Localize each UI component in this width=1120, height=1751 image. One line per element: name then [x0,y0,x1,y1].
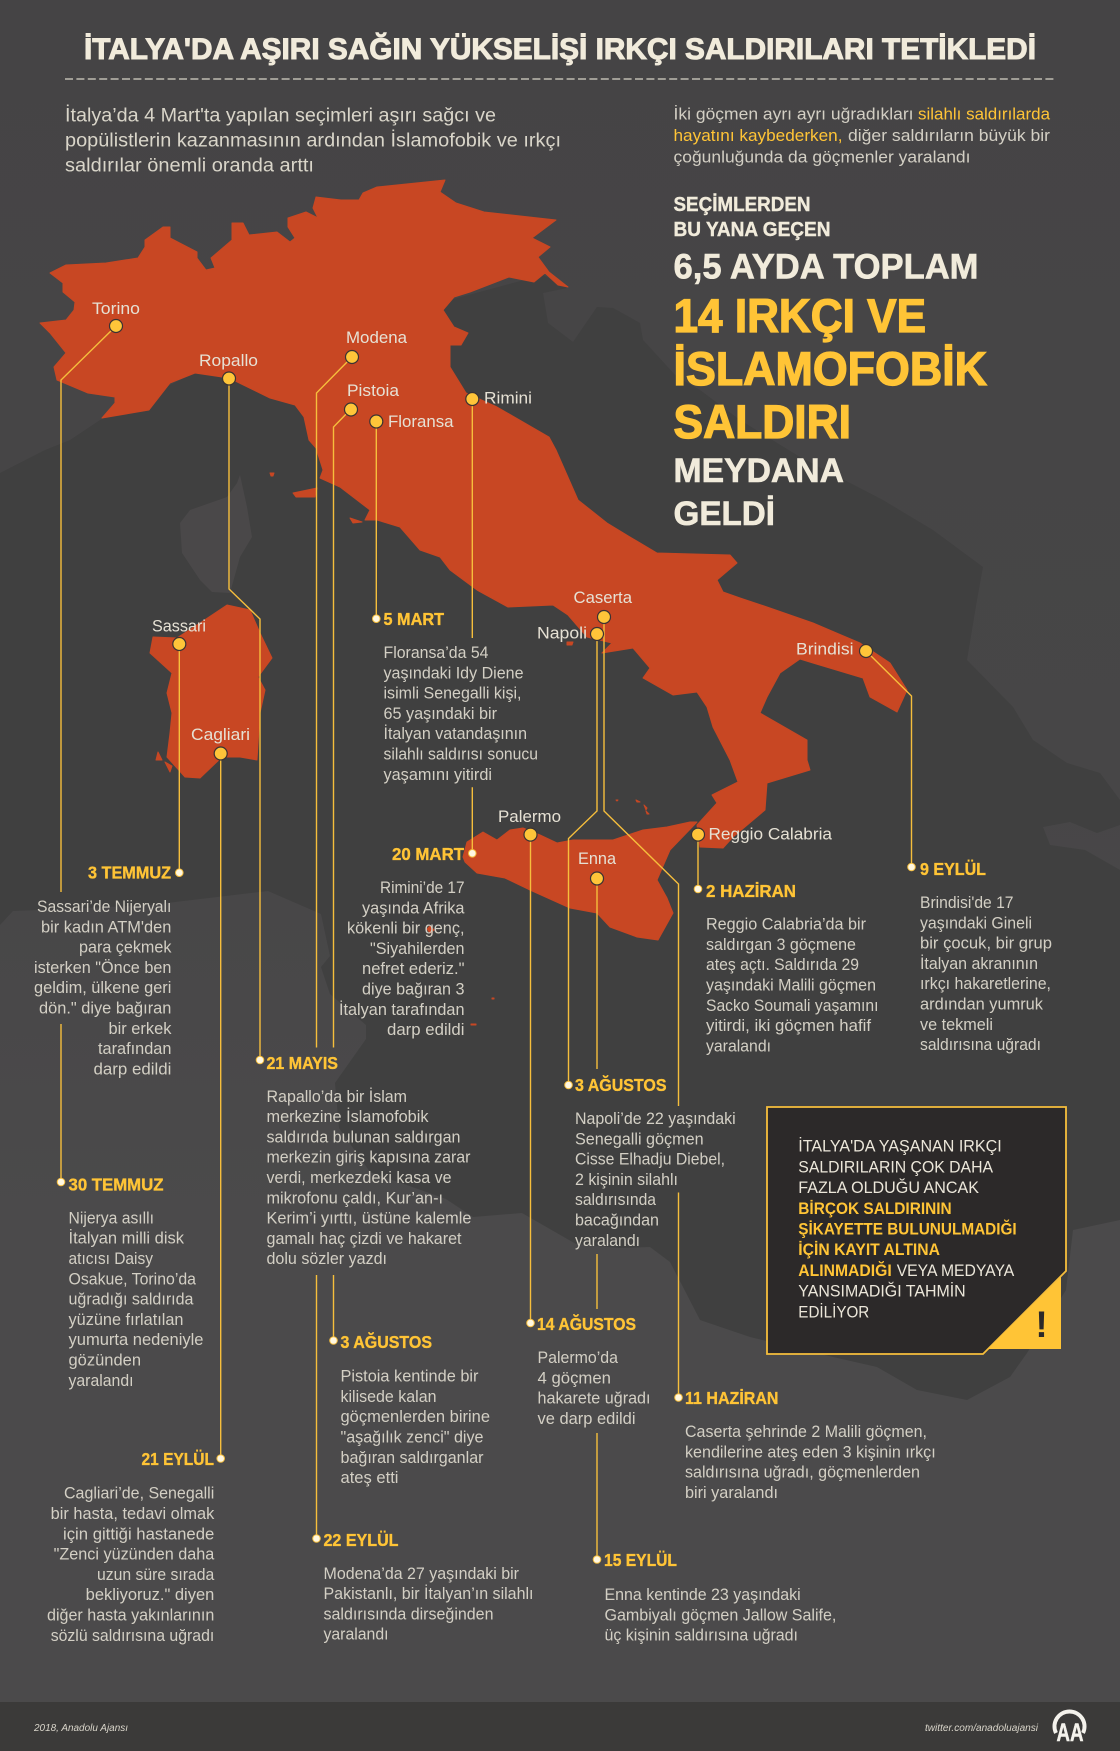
event: 21 Mayis: Kerim’i yırttı, üstüne kalemle [266,1210,472,1228]
intro text right: silahlı saldırılarda [918,105,1051,124]
event: 30 Temmuz [68,1174,204,1390]
connector: Brindisi to 9 Eylul: Brindisi [796,640,854,658]
connector: Rimini to 20 Mart [466,390,532,857]
connector: Floransa to 5 Mart: Floransa [388,413,454,431]
event: 2 Haziran [706,881,878,1055]
event: 14 Agustos: 4 göçmen [538,1369,611,1387]
event: 3 Agustos Napoli: saldırısında [575,1191,657,1209]
connector: Brindisi to 9 Eylul [796,640,915,871]
event: 30 Temmuz: yaralandı [68,1372,134,1390]
event: 5 Mart: yaşındaki Idy Diene [384,664,524,682]
callout text: ŞİKAYETTE BULUNULMADIĞI [798,1220,1017,1239]
headline stat block: SEÇİMLERDEN [674,193,810,216]
event: 2 Haziran: Sacko Soumali yaşamını [706,997,878,1015]
event: 21 Eylul: için gittiği hastanede [63,1525,214,1543]
event: 20 Mart: İtalyan tarafından [339,1000,464,1019]
event: 15 Eylul: üç kişinin saldırısına uğradı [604,1627,798,1645]
event: 3 Agustos Napoli [575,1074,736,1250]
event: 3 Agustos Pistoia: ateş etti [340,1469,398,1487]
event: 21 Mayis: Rapallo’da bir İslam [266,1087,407,1106]
event: 14 Agustos: ve darp edildi [538,1410,636,1428]
connector: Sassari to 3 Temmuz: Sassari [152,618,206,636]
event: 30 Temmuz: gözünden [68,1352,141,1370]
headline stat block: 6,5 AYDA TOPLAM [674,248,978,286]
event: 21 Mayis: verdi, merkezdeki kasa ve [266,1169,452,1187]
intro text right [674,105,1051,166]
event: 21 Mayis: merkezine İslamofobik [266,1107,429,1126]
event: 9 Eylul: Brindisi'de 17 [920,894,1014,912]
event: 11 Haziran: biri yaralandı [685,1484,778,1502]
event: 3 Temmuz: geldim, ülkene geri [34,979,171,997]
event: 21 Eylul: Cagliari’de, Senegalli [64,1485,214,1503]
event: 21 Mayis: 21 MAYIS [266,1053,338,1073]
intro text left: saldırılar önemli oranda arttı [65,156,314,176]
icon: AA logo [1054,1711,1084,1747]
event: 22 Eylul: Pakistanlı, bir İtalyan’ın silahlı [324,1584,534,1603]
event: 14 Agustos: hakarete uğradı [538,1390,650,1408]
connector: Ropallo to 21 Mayis: Ropallo [199,352,258,370]
callout text: İÇİN KAYIT ALTINA [798,1240,940,1259]
event: 20 Mart: darp edildi [387,1021,464,1039]
event: 3 Agustos Napoli: 2 kişinin silahlı [575,1171,678,1189]
connector: Ropallo to 21 Mayis [199,352,264,1064]
intro text right: hayatını kaybederken, [674,126,842,145]
event: 3 Agustos Pistoia: 3 AĞUSTOS [340,1331,432,1352]
event: 15 Eylul: 15 EYLÜL [604,1550,677,1570]
footer: 2018, Anadolu Ajansı [33,1723,128,1734]
event: 30 Temmuz: uğradığı saldırıda [68,1291,194,1309]
callout text: ALINMADIĞI [798,1261,892,1280]
connector: Cagliari to 21 Eylul [191,726,250,1462]
event: 30 Temmuz: yumurta nedeniyle [68,1331,204,1349]
event: 21 Mayis [266,1053,472,1268]
event: 5 Mart [384,609,538,784]
connector: Napoli to 3 Agustos [537,624,604,1089]
event: 3 Temmuz: bir kadın ATM'den [41,918,171,936]
event: 2 Haziran: saldırgan 3 göçmene [706,936,856,954]
event: 30 Temmuz: atıcısı Daisy [68,1250,154,1268]
connector: Rimini to 20 Mart: Rimini [484,390,532,408]
event: 21 Eylul: "Zenci yüzünden daha [54,1546,215,1564]
headline stat block: GELDİ [674,495,775,533]
mainland [40,180,907,848]
event: 15 Eylul: Enna kentinde 23 yaşındaki [604,1586,801,1604]
event: 3 Temmuz: dön." diye bağıran [39,1000,171,1018]
event: 3 Agustos Pistoia [340,1331,490,1487]
callout text: VEYA MEDYAYA [897,1261,1015,1280]
event: 30 Temmuz: 30 TEMMUZ [68,1174,164,1194]
event: 3 Agustos Napoli: Cisse Elhadju Diebel, [575,1151,725,1169]
callout text: BİRÇOK SALDIRININ [798,1199,952,1218]
event: 3 Agustos Napoli: yaralandı [575,1232,640,1250]
event: 30 Temmuz: Nijerya asıllı [68,1209,154,1227]
event: 11 Haziran [685,1388,936,1502]
event: 20 Mart: "Siyahilerden [370,940,464,958]
event: 3 Temmuz: darp edildi [94,1060,171,1078]
connector: Pistoia to 3 Agustos: Pistoia [347,382,400,400]
event: 21 Eylul: bir hasta, tedavi olmak [51,1505,215,1523]
event: 3 Temmuz: bir erkek [108,1020,172,1038]
event: 2 Haziran: yaralandı [706,1037,771,1055]
connector: Pistoia to 3 Agustos [330,382,400,1344]
event: 5 Mart: isimli Senegalli kişi, [384,685,522,703]
event: 2 Haziran: ateş açtı. Saldırıda 29 [706,956,859,974]
headline stat block: 14 IRKÇI VE [674,289,926,342]
title: İTALYA'DA AŞIRI SAĞIN YÜKSELİŞİ IRKÇI SALDIRILARI TETİKLEDİ [84,32,1036,66]
event: 11 Haziran: Caserta şehrinde 2 Malili göçmen, [685,1423,927,1441]
callout text: SALDIRILARIN ÇOK DAHA [798,1158,994,1177]
event: 3 Agustos Napoli: bacağından [575,1212,659,1230]
event: 15 Eylul: Gambiyalı göçmen Jallow Salife, [604,1606,836,1624]
map of Italy [40,180,907,1025]
event: 22 Eylul [324,1530,534,1644]
connector: Enna to 15 Eylul: Enna [578,850,617,868]
event: 20 Mart: yaşında Afrika [362,899,465,917]
intro text right: çoğunluğunda da göçmenler yaralandı [674,148,970,166]
event: 21 Eylul: uzun süre sırada [97,1566,215,1584]
connector: Napoli to 3 Agustos: Napoli [537,624,587,642]
callout box [767,1107,1066,1354]
event: 3 Agustos Pistoia: bağıran saldırganlar [340,1449,484,1467]
event: 14 Agustos: 14 AĞUSTOS [537,1313,636,1334]
event: 3 Agustos Pistoia: göçmenlerden birine [340,1408,490,1426]
callout text: EDİLİYOR [798,1303,869,1322]
callout text: İTALYA'DA YAŞANAN IRKÇI [798,1137,1002,1156]
event: 30 Temmuz: İtalyan milli disk [68,1229,185,1248]
event: 20 Mart: diye bağıran 3 [362,980,464,998]
event: 30 Temmuz: yüzüne fırlatılan [68,1311,184,1329]
intro text right: İki göçmen ayrı ayrı uğradıkları [674,105,914,124]
connector: Cagliari to 21 Eylul: Cagliari [191,726,250,744]
event: 21 Eylul: 21 EYLÜL [142,1449,214,1469]
intro text left: İtalya’da 4 Mart'ta yapılan seçimleri aşırı sağcı ve [65,106,496,126]
event: 14 Agustos [537,1313,650,1428]
event: 9 Eylul: ırkçı hakaretlerine, [920,975,1051,993]
event: 9 Eylul: saldırısına uğradı [920,1036,1041,1054]
event: 2 Haziran: Reggio Calabria’da bir [706,916,867,934]
event: 5 Mart: 5 MART [384,609,444,629]
event: 20 Mart: kökenli bir genç, [347,920,464,938]
event: 22 Eylul: yaralandı [324,1626,388,1644]
connector: Sassari to 3 Temmuz [152,618,206,876]
event: 20 Mart: nefret ederiz." [362,960,465,978]
event: 3 Agustos Pistoia: Pistoia kentinde bir [340,1368,479,1386]
icon: AA logo: AA [1056,1719,1084,1747]
event: 9 Eylul: ve tekmeli [920,1016,993,1034]
event: 21 Mayis: mikrofonu çaldı, Kur’an-ı [266,1189,443,1207]
event: 21 Eylul: bekliyoruz." diyen [86,1586,214,1604]
headline stat block [674,193,987,533]
callout text: FAZLA OLDUĞU ANCAK [798,1178,979,1197]
event: 21 Eylul [47,1449,215,1645]
connector: Reggio Calabria to 2 Haziran [692,826,833,893]
event: 20 Mart [339,844,465,1039]
event: 5 Mart: İtalyan vatandaşının [384,724,527,743]
event: 9 Eylul: İtalyan akranının [920,954,1038,973]
callout text: YANSIMADIĞI TAHMİN [798,1282,966,1301]
connector: Palermo to 14 Agustos [498,808,561,1327]
Sicily [463,822,697,940]
footer: twitter.com/anadoluajansi [925,1723,1039,1734]
event: 9 Eylul: ardından yumruk [920,996,1044,1014]
event: 3 Agustos Pistoia: "aşağılık zenci" diye [340,1428,484,1446]
event: 20 Mart: 20 MART [392,844,464,864]
small islands [156,473,649,1025]
headline stat block: İSLAMOFOBİK [674,342,987,395]
event: 11 Haziran: kendilerine ateş eden 3 kişinin ırkçı [685,1443,936,1461]
event: 14 Agustos: Palermo’da [538,1349,619,1367]
event: 9 Eylul: bir çocuk, bir grup [920,935,1052,953]
callout text [798,1137,1017,1322]
event: 2 Haziran: yaşındaki Malili göçmen [706,976,876,994]
event: 2 Haziran: 2 HAZİRAN [706,881,796,901]
event: 5 Mart: silahlı saldırısı sonucu [384,746,538,764]
connector: Enna to 15 Eylul [578,850,617,1563]
event: 3 Agustos Napoli: Senegalli göçmen [575,1130,704,1148]
icon: warning corner [988,1277,1061,1349]
intro text left [65,106,561,176]
headline stat block: MEYDANA [674,452,844,490]
event: 22 Eylul: saldırısında dirseğinden [324,1605,494,1623]
event: 22 Eylul: Modena’da 27 yaşındaki bir [324,1565,520,1583]
event: 11 Haziran: saldırısına uğradı, göçmenlerden [685,1464,920,1482]
event: 21 Mayis: saldırıda bulunan saldırgan [266,1128,460,1146]
event: 21 Mayis: merkezin giriş kapısına zarar [266,1149,471,1167]
event: 3 Agustos Napoli: Napoli’de 22 yaşındaki [575,1110,736,1128]
event: 3 Temmuz: isterken "Önce ben [34,959,171,977]
connector: Caserta to 11 Haziran [574,589,682,1401]
event: 3 Agustos Pistoia: kilisede kalan [340,1388,436,1406]
event: 21 Eylul: sözlü saldırısına uğradı [51,1627,214,1645]
event: 5 Mart: yaşamını yitirdi [384,766,492,784]
connector: Modena to 22 Eylul [313,329,408,1542]
footer [0,1702,1120,1751]
headline stat block: SALDIRI [674,395,851,448]
event: 22 Eylul: 22 EYLÜL [324,1530,399,1550]
event: 21 Mayis: dolu sözler yazdı [266,1250,387,1268]
event: 3 Agustos Napoli: 3 AĞUSTOS [575,1074,666,1095]
event: 30 Temmuz: Osakue, Torino’da [68,1270,197,1288]
intro text left: popülistlerin kazanmasının ardından İslamofobik ve ırkçı [65,130,561,152]
connector: Modena to 22 Eylul: Modena [346,329,408,347]
event: 3 Temmuz: para çekmek [79,939,172,957]
sea background [0,275,1120,1400]
Sardinia [150,605,272,778]
intro text right: diğer saldırıların büyük bir [848,126,1050,145]
event: 21 Mayis: gamalı haç çizdi ve hakaret [266,1230,462,1248]
event: 9 Eylul: yaşındaki Gineli [920,914,1032,932]
Corsica [180,475,252,593]
event: 9 Eylul: 9 EYLÜL [920,859,986,879]
event: 11 Haziran: 11 HAZİRAN [685,1388,778,1408]
connector: Caserta to 11 Haziran: Caserta [574,589,633,607]
headline stat block: BU YANA GEÇEN [674,218,830,241]
event: 3 Temmuz: tarafından [98,1040,171,1058]
event: 3 Temmuz: Sassari’de Nijeryalı [37,898,171,916]
event: 21 Eylul: diğer hasta yakınlarının [47,1606,214,1624]
connector: Torino to 30 Temmuz [57,300,140,1186]
icon: warning corner: ! [1035,1304,1048,1345]
event: 15 Eylul [604,1550,836,1645]
event: 5 Mart: Floransa’da 54 [384,644,488,662]
connector: Palermo to 14 Agustos: Palermo [498,808,561,826]
event: 3 Temmuz: 3 TEMMUZ [88,863,171,883]
connector: Floransa to 5 Mart [370,413,454,622]
event: 5 Mart: 65 yaşındaki bir [384,705,498,723]
connector: Reggio Calabria to 2 Haziran: Reggio Calabria [708,826,833,844]
event: 9 Eylul [920,859,1052,1054]
connector: Torino to 30 Temmuz: Torino [92,300,140,318]
event: 3 Temmuz [34,863,172,1078]
event: 2 Haziran: yitirdi, iki göçmen hafif [706,1017,871,1035]
event: 20 Mart: Rimini’de 17 [380,879,464,897]
